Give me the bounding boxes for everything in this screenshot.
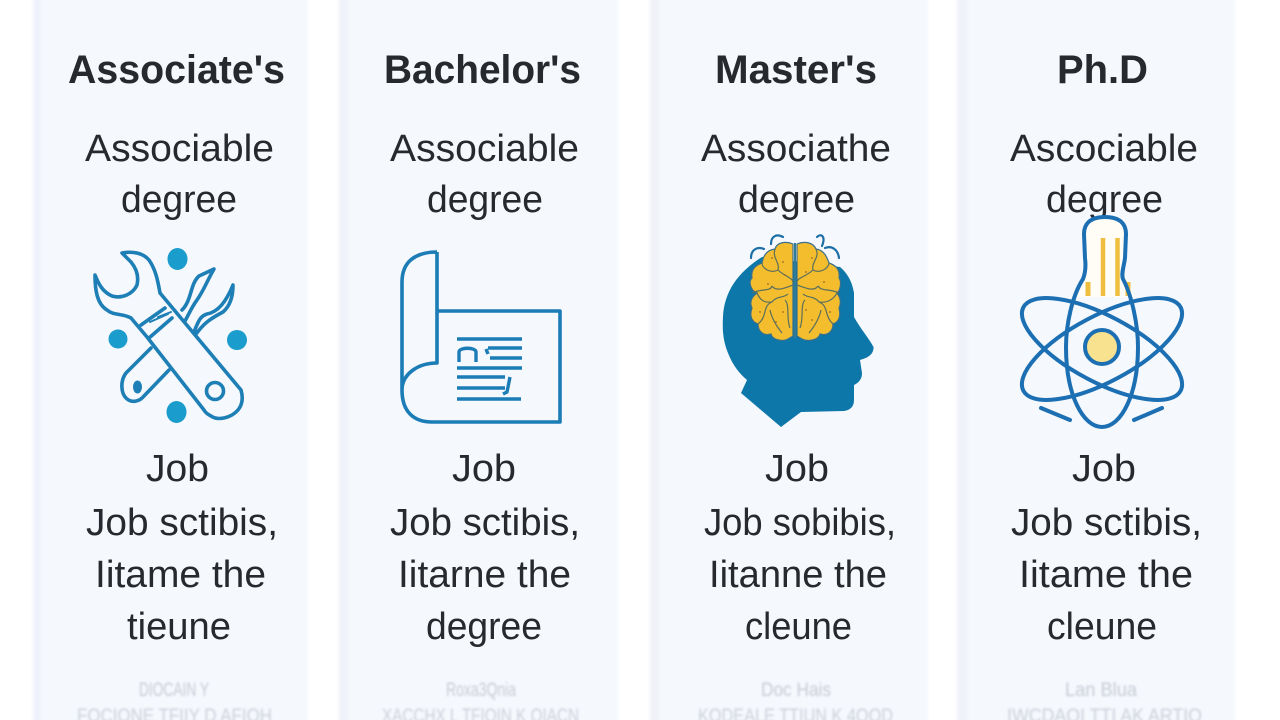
degree description: degree [427, 179, 543, 221]
flask outline [1066, 217, 1138, 427]
degree description: Ascociable [1010, 128, 1198, 170]
job description: Job sobibis, [704, 502, 896, 544]
brain [750, 242, 840, 340]
atom orbits [1008, 278, 1196, 420]
heading: Bachelor's: Bachelor's [384, 48, 581, 92]
job description: Job [452, 448, 516, 490]
job description: Job sctibis, [390, 502, 580, 544]
job description [704, 448, 896, 648]
card background [650, 0, 928, 720]
card background [957, 0, 1235, 720]
footer note: Roxa3Qnia [446, 680, 516, 701]
job description: Iitame the [1019, 554, 1193, 596]
degree description: degree [738, 179, 855, 221]
footer note: DIOCAIN Y [139, 680, 209, 701]
icon: document scroll [402, 252, 560, 422]
icon: crossed tools [95, 248, 247, 423]
job description: Job [765, 448, 829, 490]
job description: cleune [745, 606, 852, 648]
heading: Ph.D: Ph.D [1057, 48, 1148, 92]
degree description [85, 128, 274, 221]
panel: Associate's [33, 0, 308, 720]
degree description: degree [1046, 179, 1163, 221]
footer note [77, 680, 272, 720]
degree description [1010, 128, 1198, 221]
job description: Job sctibis, [86, 502, 278, 544]
base dashes [1041, 408, 1162, 420]
atom nucleus [1085, 330, 1119, 364]
card background [339, 0, 618, 720]
degree description: Associable [390, 128, 579, 170]
job description: cleune [1047, 606, 1157, 648]
degree description [701, 128, 891, 221]
footer note [1007, 680, 1202, 720]
degree description: degree [121, 179, 237, 221]
job description: Iitanne the [709, 554, 887, 596]
job description: Job sctibis, [1011, 502, 1202, 544]
footer note [698, 680, 893, 720]
job description: Iitame the [95, 554, 266, 596]
panel: Bachelor's [339, 0, 618, 720]
flask neck [1076, 217, 1134, 297]
job description: Job [1072, 448, 1136, 490]
heading: Master's: Master's [715, 48, 877, 92]
job description: degree [426, 606, 542, 648]
degree description: Associathe [701, 128, 891, 170]
icon: head with brain [723, 235, 874, 427]
footer note: Doc Hais [761, 680, 831, 701]
head silhouette [723, 257, 874, 427]
brain centre line [794, 243, 796, 338]
job description [1011, 448, 1202, 648]
panel: Master's [650, 0, 928, 720]
job description: Job [146, 448, 209, 490]
job description: tieune [127, 606, 231, 648]
brain signal arcs [751, 235, 839, 258]
panel: Ph.D [957, 0, 1235, 720]
icon: atom with flask [1008, 217, 1196, 427]
flask stripes [1088, 238, 1128, 296]
footer note: Lan Blua [1065, 680, 1137, 701]
degree description [390, 128, 579, 221]
job description: Iitarne the [398, 554, 571, 596]
card background [33, 0, 308, 720]
job description [86, 448, 278, 648]
job description [390, 448, 580, 648]
heading: Associate's: Associate's [68, 48, 285, 92]
degree description: Associable [85, 128, 274, 170]
footer note [382, 680, 579, 720]
